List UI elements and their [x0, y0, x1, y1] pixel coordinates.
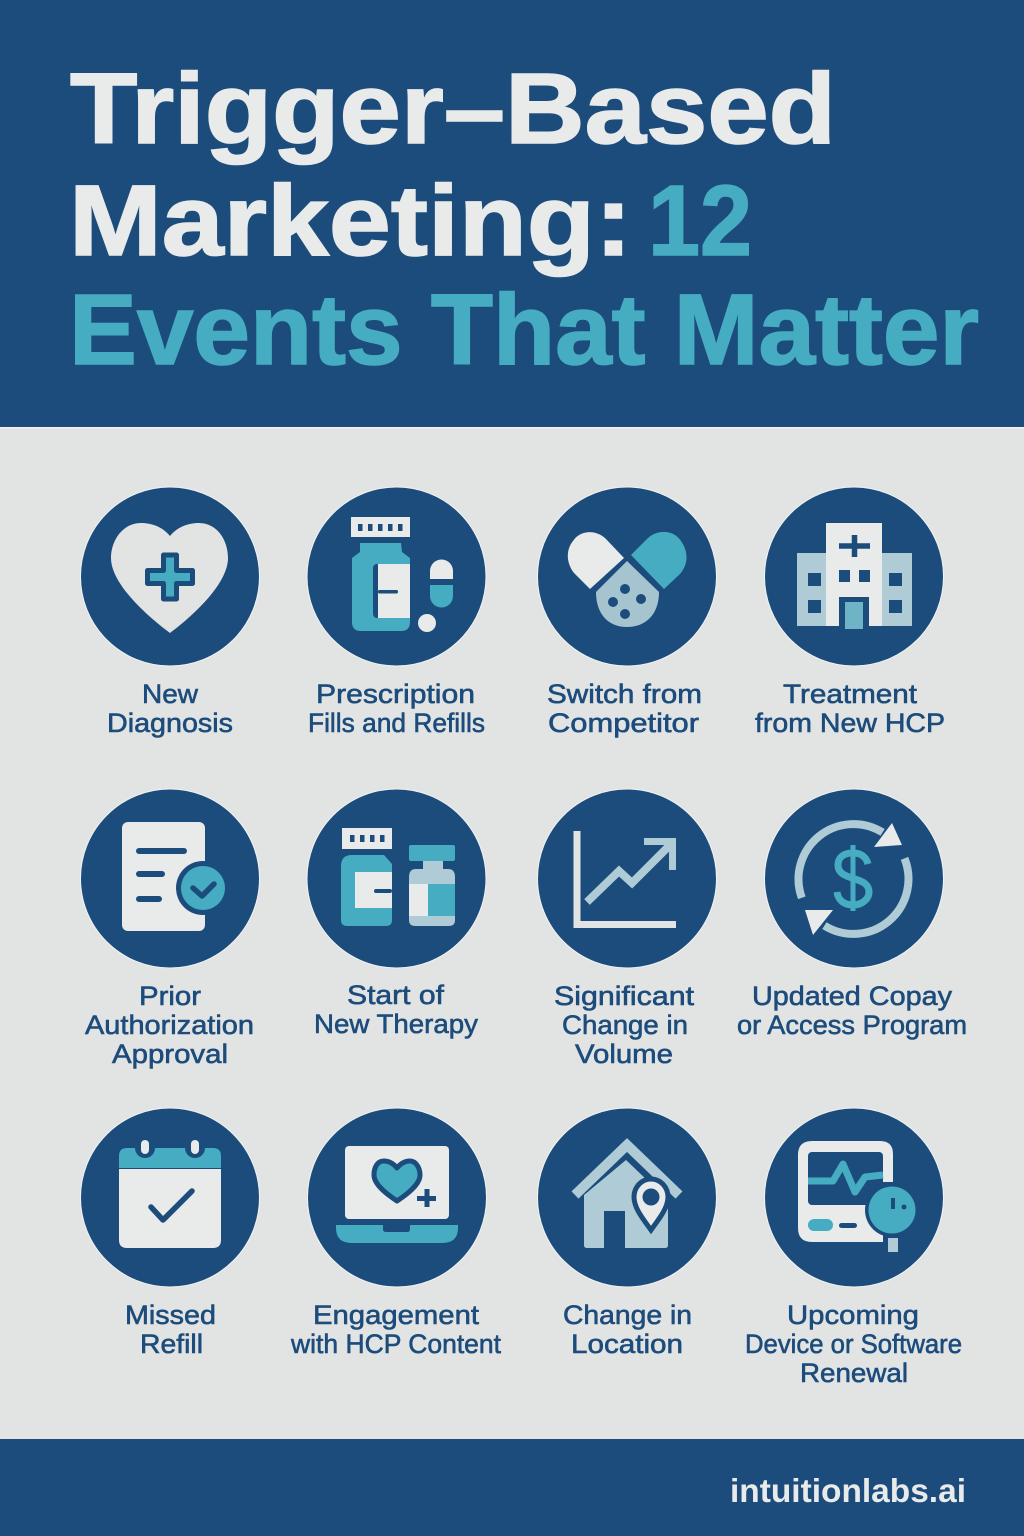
label [563, 1300, 692, 1359]
title [69, 53, 979, 386]
label: Engagement [313, 1300, 480, 1330]
label: Volume [575, 1039, 673, 1069]
icon: heart with cross [80, 487, 260, 666]
label [85, 981, 254, 1069]
label: Authorization [85, 1010, 254, 1040]
panel: Prior Authorization Approval [80, 789, 260, 1069]
footer band [0, 1439, 1024, 1536]
label: Significant [554, 981, 695, 1011]
panel: Start of New Therapy [307, 789, 486, 1039]
label [107, 679, 233, 738]
panel: Missed Refill [80, 1108, 260, 1359]
title: Trigger–Based [70, 53, 836, 165]
panel: New Diagnosis [80, 487, 260, 738]
label: Refill [140, 1329, 203, 1359]
label: with HCP Content [290, 1329, 501, 1359]
label: Switch from [547, 679, 702, 709]
footer brand text: intuitionlabs.ai [730, 1472, 966, 1509]
icon: bottle and vial [307, 789, 486, 968]
label: Location [571, 1329, 683, 1359]
label [554, 981, 695, 1069]
panel: Significant Change in Volume [538, 789, 716, 1069]
icon: split capsule [538, 487, 716, 666]
panel: Prescription Fills and Refills [307, 487, 486, 738]
title: Events That Matter [69, 274, 979, 386]
label: Competitor [548, 708, 699, 738]
label: Approval [112, 1039, 228, 1069]
icon: line chart with arrow [538, 789, 716, 968]
icon: dollar with circular arrows [764, 789, 944, 968]
label [737, 981, 967, 1040]
panel: Change in Location [538, 1108, 716, 1359]
label: Change in [563, 1300, 692, 1330]
label: Start of [347, 980, 445, 1010]
label: New [142, 679, 199, 709]
label: Diagnosis [107, 708, 233, 738]
label: Renewal [800, 1358, 908, 1388]
label [314, 980, 479, 1039]
icon: pill bottle and capsule [307, 487, 486, 666]
label: from New HCP [755, 708, 945, 738]
label [308, 679, 485, 738]
panel: Engagement with HCP Content [290, 1108, 501, 1359]
panel: Upcoming Device or Software Renewal [745, 1108, 962, 1388]
label: Prior [139, 981, 201, 1011]
icon: device monitor with magnifier [764, 1108, 944, 1287]
panel: Updated Copay or Access Program [737, 789, 967, 1040]
label: Device or Software [745, 1329, 962, 1359]
label: New Therapy [314, 1009, 479, 1039]
header band [0, 0, 1024, 428]
label [290, 1300, 501, 1359]
label [755, 679, 945, 738]
icon: house with map pin [538, 1108, 716, 1287]
label: Fills and Refills [308, 708, 485, 738]
icon: laptop with heart [308, 1108, 486, 1287]
title: Marketing: [69, 165, 632, 277]
label [125, 1300, 216, 1359]
label: Prescription [316, 679, 475, 709]
icon: calendar with check [80, 1108, 260, 1287]
label: Upcoming [787, 1300, 919, 1330]
label [745, 1300, 962, 1388]
icon: hospital [764, 487, 944, 666]
label: Change in [562, 1010, 688, 1040]
icon: document with check badge [80, 789, 260, 968]
title: 12 [648, 165, 752, 277]
panel: Switch from Competitor [538, 487, 716, 738]
label [547, 679, 702, 738]
label: Treatment [783, 679, 918, 709]
label: Missed [125, 1300, 216, 1330]
label: Updated Copay [752, 981, 953, 1011]
panel: Treatment from New HCP [755, 487, 945, 738]
label: or Access Program [737, 1010, 967, 1040]
